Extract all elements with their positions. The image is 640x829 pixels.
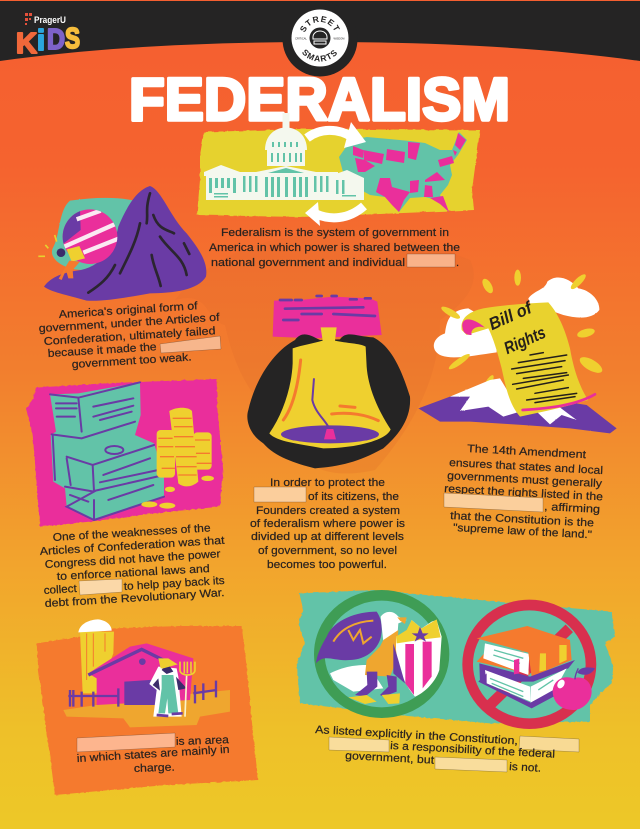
Street Smarts badge: CRITICAL	[295, 36, 307, 40]
blank answer box	[79, 579, 122, 595]
text: founders: In order to protect the	[270, 477, 385, 489]
illustration: eagle and banned books	[297, 590, 615, 724]
bell body	[269, 327, 391, 448]
illustration: boulder and mountain	[38, 186, 206, 301]
text: founders: divided up at different levels	[251, 531, 405, 543]
scroll	[461, 302, 588, 417]
arrow: bottom circular	[316, 206, 364, 218]
text: articles weaknesses: collect	[43, 583, 77, 597]
pitchfork	[185, 675, 187, 717]
fence	[68, 681, 217, 707]
scroll text lines	[512, 353, 577, 403]
text: 14th amendment: The 14th Amendment	[467, 443, 586, 461]
purple mountain	[418, 388, 617, 433]
blank answer box	[329, 737, 389, 752]
header band	[0, 1, 640, 61]
books and apple	[477, 626, 595, 710]
blank answer box	[160, 336, 221, 353]
illustration: stacks of money and coins	[26, 379, 223, 527]
text: 14th amendment: governments must generally	[447, 470, 603, 490]
text: articles weaknesses: Articles of Confederation was that	[39, 535, 225, 558]
striped ball	[62, 208, 119, 265]
KIDS wordmark: D	[47, 24, 65, 56]
teal blob	[52, 198, 134, 270]
PragerU Kids logo	[16, 13, 80, 60]
text: articles of confederation	[38, 300, 221, 371]
bell opening	[281, 425, 379, 443]
icon: PragerU dots	[25, 13, 32, 25]
text: articles weaknesses: Congress did not have the power	[44, 548, 221, 571]
KIDS wordmark: i	[37, 25, 45, 57]
text: founders: of government, so no level	[258, 545, 397, 557]
illustration: farm	[37, 619, 258, 795]
text: founders: of federalism where power is	[250, 518, 406, 530]
KIDS wordmark: S	[65, 23, 80, 55]
text: state area	[76, 733, 230, 775]
text: 14th amendment: "supreme law of the land."	[453, 522, 592, 541]
text: articles weaknesses	[39, 522, 226, 610]
farmer	[149, 658, 195, 717]
faint background eagle	[175, 234, 474, 474]
text: constitution responsibilities	[315, 724, 579, 775]
text: articles weaknesses: debt from the Revolutionary War.	[44, 587, 225, 610]
rays	[480, 270, 605, 376]
money stacks	[50, 382, 164, 520]
Street Smarts badge: SMARTS	[302, 50, 337, 62]
text: state area: charge.	[134, 762, 175, 775]
person pushing	[57, 246, 85, 280]
red prohibited ring	[468, 605, 591, 724]
text: articles weaknesses: to enforce national laws and	[57, 563, 210, 583]
green ring	[319, 595, 444, 713]
blank answer box	[435, 757, 507, 772]
KIDS wordmark: K	[16, 28, 37, 60]
blank answer box	[77, 733, 175, 752]
text: federalism definition: .	[456, 257, 459, 269]
text: federalism definition: America in which power is shared between the	[209, 242, 460, 254]
text: 14th amendment	[444, 443, 603, 541]
text: articles of confederation: because it made the	[47, 341, 157, 360]
text: founders: becomes too powerful.	[267, 559, 387, 571]
black shadow blob	[247, 334, 410, 468]
title: FEDERALISM	[129, 66, 510, 133]
text: articles of confederation: government, under the Articles of	[38, 312, 221, 335]
text: articles of confederation: America's original form of	[58, 300, 199, 321]
pink panel	[26, 379, 223, 527]
blank answer box	[519, 736, 579, 752]
clouds	[434, 277, 599, 357]
snow	[450, 378, 577, 424]
text: state area: is an area	[176, 734, 230, 748]
text: constitution responsibilities: is a responsibility of the federal	[390, 740, 555, 761]
text: founders	[250, 477, 406, 571]
text: articles of confederation: Confederation, ultimately failed	[43, 325, 216, 348]
motion rays	[38, 235, 57, 256]
US map	[339, 132, 467, 212]
text: articles weaknesses: to help pay back its	[123, 575, 226, 593]
bill of rights lettering: Rights	[501, 322, 549, 358]
text: 14th amendment: that the Constitution is the	[450, 510, 594, 530]
text: articles weaknesses: One of the weaknesses of the	[52, 522, 211, 544]
Street Smarts badge: WISDOM	[334, 36, 344, 40]
text: constitution responsibilities: government, but	[345, 750, 434, 767]
capitol building	[204, 113, 364, 200]
yellow swatch	[197, 129, 480, 217]
barn	[88, 643, 193, 705]
blank answer box	[254, 487, 306, 502]
text: founders: Founders created a system	[256, 505, 400, 517]
text: federalism definition: Federalism is the system of government in	[221, 227, 449, 239]
text: 14th amendment: ensures that states and local	[449, 457, 603, 477]
coin stacks	[141, 408, 214, 509]
silo	[78, 619, 114, 693]
blank answer box	[444, 493, 543, 512]
illustration: bill of rights	[418, 270, 617, 433]
mountain	[44, 186, 206, 301]
bill of rights lettering: Bill of	[485, 297, 537, 334]
orange panel	[37, 626, 258, 795]
text: 14th amendment: , affirming	[544, 501, 600, 516]
text: state area: in which states are mainly in	[76, 744, 230, 765]
text: 14th amendment: respect the rights listed in the	[444, 483, 603, 503]
teal panel	[297, 590, 615, 723]
text: federalism definition	[209, 227, 460, 269]
illustration: capitol and US map	[197, 113, 480, 226]
blank answer box	[407, 254, 455, 267]
arrow: top circular	[307, 130, 352, 138]
text: founders: of its citizens, the	[308, 491, 399, 503]
illustration: liberty bell	[247, 296, 410, 468]
shield	[396, 620, 442, 697]
Street Smarts badge	[282, 10, 358, 76]
text: constitution responsibilities: is not.	[509, 761, 541, 775]
states highlighted	[353, 133, 466, 212]
PragerU wordmark: PragerU	[34, 15, 66, 25]
KIDS wordmark	[16, 23, 80, 60]
ground	[63, 690, 230, 727]
text: constitution responsibilities: As listed explicitly in the Constitution,	[315, 724, 518, 747]
ray accents	[440, 272, 588, 393]
bill of rights lettering	[485, 297, 549, 358]
scroll curl	[462, 319, 485, 335]
crack	[312, 378, 328, 427]
eagle	[316, 612, 442, 704]
text: articles of confederation: government too weak.	[71, 351, 192, 371]
text: federalism definition: national government and individual	[211, 257, 405, 269]
bell yoke	[273, 296, 382, 338]
clapper	[324, 429, 336, 439]
Street Smarts badge: STREET	[300, 16, 340, 32]
